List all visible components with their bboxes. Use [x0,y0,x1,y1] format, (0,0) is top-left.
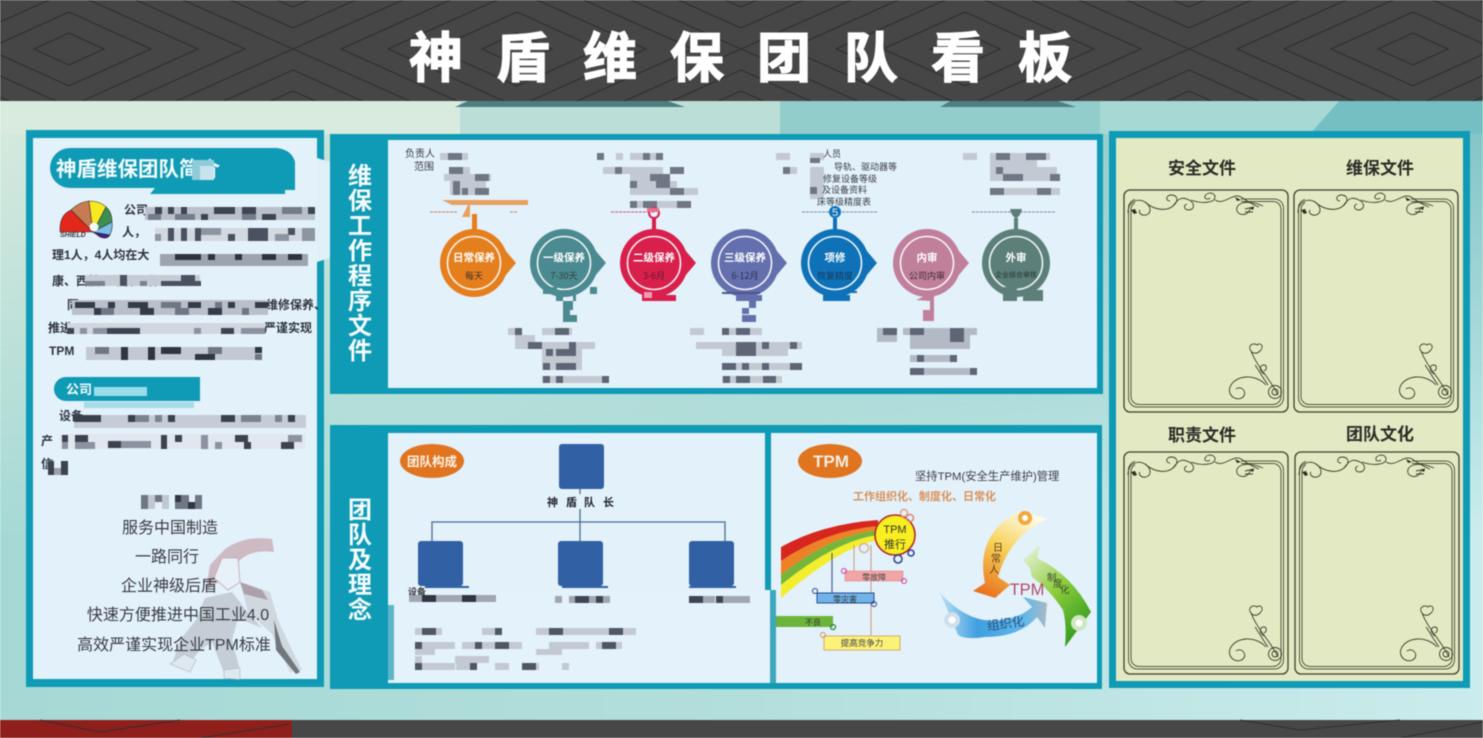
step: external audit [982,218,1050,301]
heading: team introduction: 神盾维保团队简介 [56,152,220,182]
heading: safety documents: 安全文件 [1168,154,1236,179]
org chart [408,444,750,603]
panel: maintenance procedure files [330,134,1103,394]
step: external audit: 企业综合审核 [995,270,1037,280]
label: zero defects [776,616,836,630]
illustration: iron man figure [170,538,302,680]
text block: company mission [41,408,306,509]
heading: procedure files vertical: 程 [348,256,372,291]
chart: TPM cycle arrows [940,511,1091,647]
text block: company profile: 公司 [124,203,148,217]
icon: company logo [60,201,112,239]
label: zero disasters [812,588,876,606]
step: internal audit: 公司内审 [909,269,945,282]
text block: company mission: 产 [41,433,53,448]
top note 3 [776,149,897,219]
heading: company subsection [54,377,200,408]
top note 1: 范围 [414,160,434,173]
step: internal audit [893,229,969,321]
arrow: standardization: 制度化 [1047,570,1070,596]
heading: procedure files vertical: 工 [348,206,372,241]
step: overhaul: 恢复精度 [817,269,853,282]
step: level 1 maintenance: 一级保养 [543,250,585,265]
frame: team culture [1295,452,1459,674]
frame: safety documents [1124,190,1288,412]
icon: company logo: SHIELD [60,232,86,239]
heading: team and philosophy vertical: 理 [348,565,372,600]
text block: slogan: 一路同行 [135,548,199,566]
top note 3: 人员 [823,149,841,159]
badge: team composition [400,444,464,478]
arrow: organization [940,593,1047,638]
top note 1 [405,147,528,217]
text: TPM subtitle: 工作组织化、制度化、日常化 [853,488,996,504]
top note 3: 床等级精度表 [817,196,871,207]
step: internal audit: 内审 [916,250,938,265]
org chart: member 3 [689,541,750,603]
org chart: member 1: 设备 [408,586,426,597]
text block: company profile: 严谨实现 [264,320,312,335]
text block: slogan: 企业神级后盾 [121,577,217,595]
title: 神盾维保团队看板 [409,14,1072,93]
heading: team and philosophy vertical: 队 [348,515,372,550]
label: improve competitiveness: 提高竞争力 [841,638,883,648]
step: level 1 maintenance [530,229,606,322]
step: level 1 maintenance: 7-30天 [550,269,578,282]
step: level 3 maintenance: 三级保养 [724,250,766,265]
text block: team description [415,628,636,670]
heading: team and philosophy vertical: 团 [348,490,372,525]
arrow: organization: 组织化 [986,610,1026,634]
arrow: daily [973,511,1048,598]
label: zero failures: 零故障 [862,572,886,582]
text block: company profile: 推进 [48,320,72,335]
chart: TPM promotion rainbow [776,510,915,650]
top note 3: 5 [832,207,838,219]
step: level 2 maintenance: 二级保养 [633,250,675,265]
step: level 2 maintenance [620,218,696,301]
org chart: leader [545,444,615,510]
text block: slogan: 高效严谨实现企业TPM标准 [77,636,271,654]
panel: company introduction [26,130,330,687]
heading: maintenance documents: 维保文件 [1346,154,1414,179]
step: level 3 maintenance: 6-12月 [731,269,759,282]
text block: company profile: 人， [122,225,146,239]
label: zero defects: 不良 [805,617,821,627]
label: zero failures [842,568,906,584]
text block: slogan: 快速方便推进中国工业4.0 [87,606,269,624]
heading: procedure files vertical: 序 [348,281,372,316]
badge: TPM [798,444,862,478]
text block: slogan: 服务中国制造 [122,519,218,537]
chart: TPM promotion rainbow: TPM [883,524,907,536]
text block: slogan [77,519,271,654]
bottom note 1 [508,328,609,383]
org chart: member 2 [555,541,610,603]
heading: company subsection: 公司 [66,379,92,398]
bottom note 2 [690,328,802,383]
label: zero disasters: 零灾害 [833,594,857,604]
badge: team composition: 团队构成 [407,451,457,470]
top note 3: 及设备资料 [822,184,867,195]
top note 4 [963,153,1060,218]
text: TPM center: TPM [1010,581,1044,599]
arrow: standardization [1023,545,1091,647]
label: improve competitiveness [820,632,900,650]
panel: document board [1109,131,1470,688]
text block: company profile [48,203,326,360]
text block: company mission: 信 [41,456,53,471]
top note 3: 导轨、驱动器等 [834,161,897,172]
text block: company mission: 设备 [59,408,83,423]
step: daily maintenance: 日常保养 [453,250,495,265]
heading: team and philosophy vertical: 念 [348,590,372,625]
step: level 3 maintenance [711,229,787,322]
step: external audit: 外审 [1006,250,1026,265]
top title band [0,0,1483,101]
org chart: leader: 神盾队长 [547,494,614,510]
arrow: daily: 日常人 [989,539,1003,576]
top note 3: 修复设备等级 [823,173,877,184]
heading: procedure files vertical: 保 [348,181,372,216]
step: daily maintenance [440,214,516,297]
heading: procedure files vertical: 维 [348,156,372,191]
top note 1: 负责人 [405,147,435,160]
heading: procedure files vertical: 文 [348,306,372,341]
heading: team introduction [50,148,295,194]
badge: TPM: TPM [813,452,849,471]
heading: team and philosophy vertical: 及 [348,540,372,575]
text block: company profile: 维修保养、 [266,297,326,312]
heading: team culture: 团队文化 [1346,420,1414,445]
frame: responsibility documents [1124,452,1288,674]
heading: responsibility documents: 职责文件 [1168,421,1236,446]
step: overhaul: 项修 [824,250,846,265]
step: overhaul [801,218,877,301]
chart: TPM promotion rainbow: 推行 [884,537,906,551]
frame: maintenance documents [1294,190,1458,412]
step: level 2 maintenance: 3-6月 [643,269,665,282]
top note 2 [597,153,698,218]
text block: company profile: 同 [67,298,79,312]
bottom band [0,720,1483,738]
heading: procedure files vertical: 件 [348,331,372,366]
org chart: member 1 [408,541,496,602]
text: TPM statement: 坚持TPM(安全生产维护)管理 [915,469,1059,483]
step: daily maintenance: 每天 [465,269,483,282]
heading: procedure files vertical: 作 [348,231,372,266]
bottom note 3 [877,328,977,375]
text block: company profile: TPM [49,344,74,358]
text block: company profile: 康、西航、维保工作 [52,273,160,288]
panel: team and philosophy [330,425,1102,689]
text block: company profile: 理1人，4人均在大 [52,247,149,262]
